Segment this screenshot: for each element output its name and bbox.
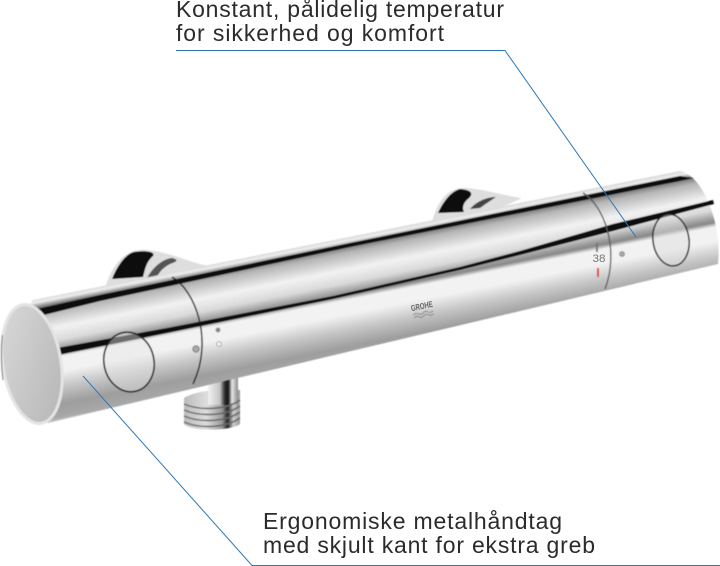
callout line: temperature bbox=[176, 50, 636, 237]
right knob bbox=[650, 212, 692, 268]
callout text: handles bbox=[263, 508, 595, 558]
small button: left bbox=[193, 346, 199, 352]
indicator dots bbox=[216, 328, 221, 346]
small button: right bbox=[620, 252, 624, 256]
upper black reflection band bbox=[36, 176, 694, 315]
wall mount: right bbox=[432, 188, 522, 222]
left knob bbox=[98, 327, 160, 397]
callout text: temperature bbox=[176, 0, 504, 46]
callout text: handles: Ergonomiske metalhåndtag bbox=[263, 508, 562, 534]
temperature scale bbox=[596, 243, 599, 277]
temperature scale number: 38 bbox=[592, 253, 606, 265]
callout line: handles bbox=[83, 376, 720, 566]
lower black reflection band bbox=[57, 200, 714, 355]
end cap bbox=[0, 300, 70, 428]
logo wave bbox=[413, 310, 434, 319]
seam ring: left handle bbox=[172, 277, 202, 384]
outlet connector with thread bbox=[184, 377, 240, 430]
callout text: handles: med skjult kant for ekstra greb bbox=[263, 532, 595, 558]
GROHE logo text: GROHE bbox=[410, 299, 434, 313]
wall mount: left bbox=[105, 250, 208, 292]
callout text: temperature: for sikkerhed og komfort bbox=[176, 20, 445, 46]
thermostat body bbox=[0, 171, 719, 428]
seam ring: right handle bbox=[583, 193, 611, 289]
end cap dark edge bbox=[1, 335, 3, 380]
